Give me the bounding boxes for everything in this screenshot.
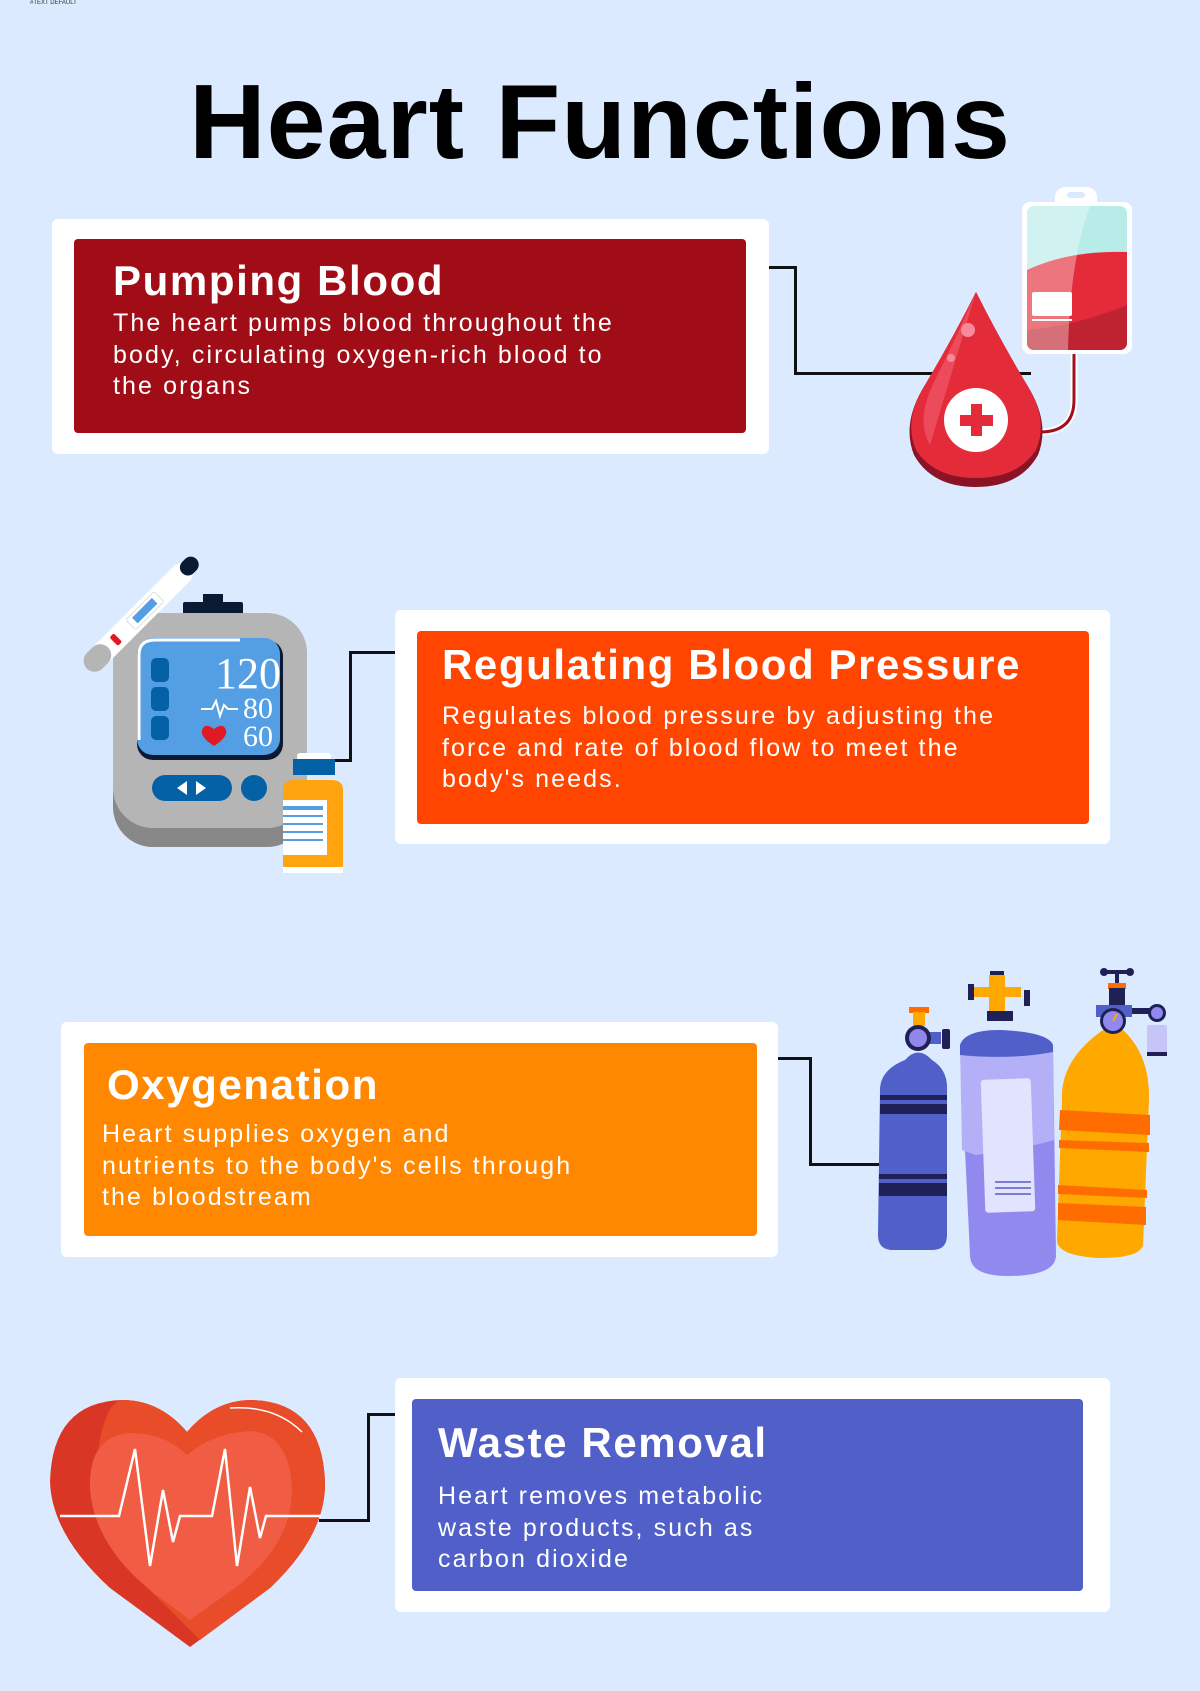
pill bottle: [297, 753, 331, 761]
lavender tank: [990, 971, 1004, 977]
text: carbon dioxide: [438, 1545, 630, 1573]
icon: blood pressure monitor: [84, 556, 343, 873]
title: Heart Functions: [189, 63, 1011, 181]
icon: blood bag and drop: [910, 187, 1132, 487]
card: pumping blood: [74, 239, 746, 433]
text: Heart removes metabolic: [438, 1482, 764, 1510]
heading: Waste Removal: [438, 1419, 768, 1466]
tube: [1005, 354, 1074, 432]
orange tank: [1100, 968, 1108, 976]
connector 2: [335, 651, 395, 762]
screen: [137, 640, 283, 760]
cross badge: [944, 388, 1008, 452]
text: the organs: [113, 372, 252, 400]
text: body, circulating oxygen-rich blood to: [113, 340, 604, 368]
icon: heart with ECG line: [50, 1400, 326, 1647]
bag: [1055, 187, 1097, 211]
text: The heart pumps blood throughout the: [113, 309, 614, 337]
connector 4: [319, 1413, 395, 1522]
buttons: [152, 775, 232, 801]
heading: Regulating Blood Pressure: [442, 641, 1021, 688]
card: [412, 1399, 1083, 1591]
text: the bloodstream: [102, 1183, 313, 1211]
body: [113, 625, 307, 847]
thermometer: [79, 551, 204, 676]
text: nutrients to the body's cells through: [102, 1152, 572, 1180]
connector 3: [778, 1057, 879, 1166]
text: [438, 1482, 764, 1573]
drop: [910, 292, 1042, 487]
icon: oxygen tanks: [878, 968, 1167, 1276]
text: body's needs.: [442, 765, 623, 793]
panel: pumping blood: [52, 219, 769, 454]
heading: Oxygenation: [107, 1061, 379, 1108]
text: Regulates blood pressure by adjusting the: [442, 702, 995, 730]
text: [102, 1120, 572, 1211]
panel: waste removal: [395, 1378, 1110, 1612]
small corner label: #TEXT DEFAULT: [30, 0, 77, 6]
text: force and rate of blood flow to meet the: [442, 734, 960, 762]
card: [84, 1043, 757, 1236]
connector 1: [769, 266, 1031, 375]
text: waste products, such as: [438, 1514, 754, 1542]
text: [442, 702, 995, 793]
panel: regulating blood pressure: [395, 610, 1110, 844]
icon: blood pressure monitor: 120: [215, 649, 281, 698]
text: Heart supplies oxygen and: [102, 1120, 451, 1148]
panel: oxygenation: [61, 1022, 778, 1257]
top knob: [203, 594, 223, 604]
heading: Pumping Blood: [113, 257, 444, 304]
text: [113, 309, 614, 400]
card: [417, 631, 1089, 824]
icon: blood pressure monitor: 60: [243, 720, 273, 753]
blue tank: [909, 1007, 929, 1013]
icon: blood pressure monitor: 80: [243, 692, 273, 725]
